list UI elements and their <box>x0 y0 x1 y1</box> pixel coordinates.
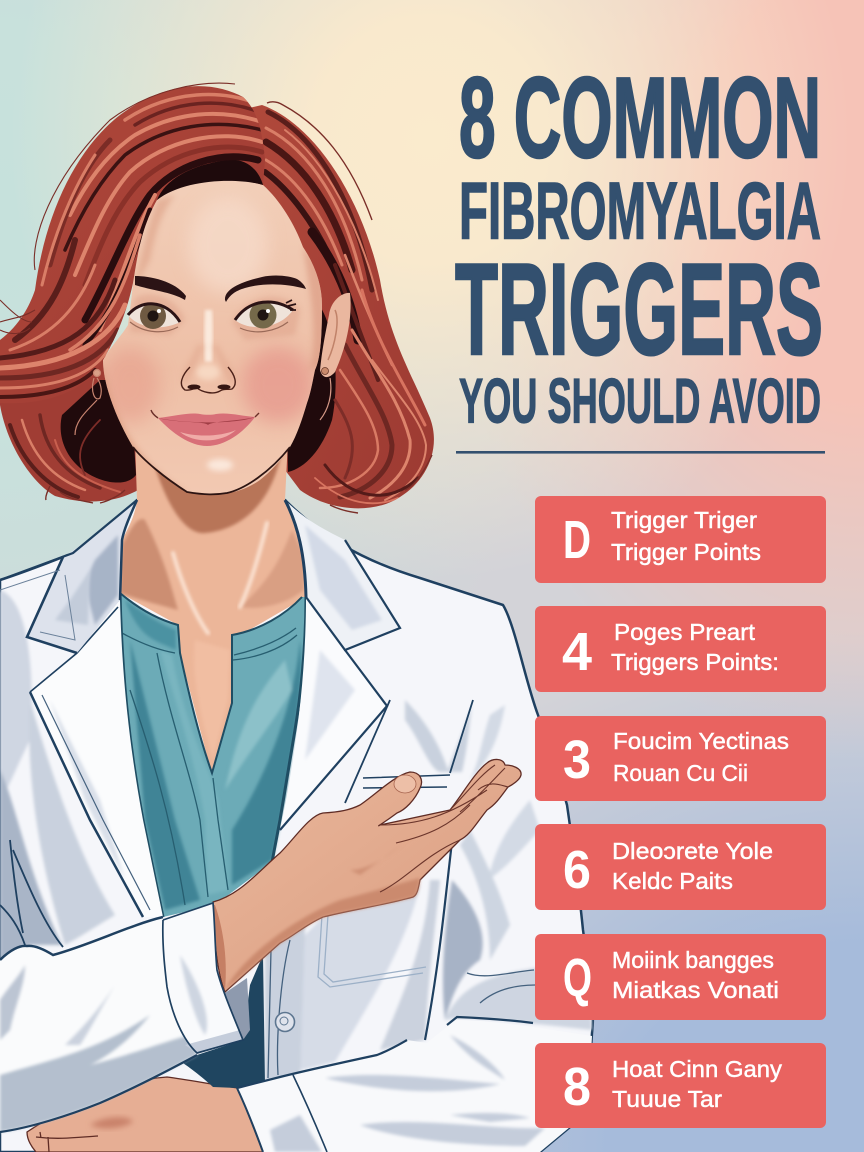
trigger card 6: 8 <box>563 1057 591 1117</box>
trigger card 1: Trigger Triger <box>611 507 757 533</box>
trigger card 4 <box>535 824 826 910</box>
lips <box>151 410 259 446</box>
trigger card 3 <box>535 716 826 801</box>
left eye <box>128 303 180 332</box>
trigger card 4: 6 <box>563 840 591 900</box>
trigger card 2: 4 <box>562 622 592 682</box>
front hair <box>0 83 265 403</box>
right ear with earring <box>320 293 351 420</box>
left sleeve <box>0 917 197 1132</box>
left cuff <box>163 903 243 1053</box>
face <box>100 180 325 494</box>
trigger card 3: Rouan Cu Cii <box>613 760 748 786</box>
trigger card 3: 3 <box>563 730 591 790</box>
raised hand <box>213 759 521 992</box>
trigger card 5: Miatkas Vonati <box>612 977 779 1003</box>
trigger card 4: Dleoɔrete Yole <box>612 838 773 864</box>
illustration: doctor <box>0 83 593 1152</box>
eyebrows <box>135 276 306 302</box>
lower hand <box>27 1077 263 1152</box>
trigger card 5 <box>535 934 826 1020</box>
trigger card 2 <box>535 606 826 692</box>
back hair <box>0 102 434 513</box>
pockets and button <box>276 775 450 1032</box>
trigger card 1: D <box>563 510 591 570</box>
neck and chest <box>120 440 306 775</box>
right sleeve <box>237 1020 592 1152</box>
left collar and lapel <box>0 500 163 917</box>
right collar and lapel <box>280 500 473 830</box>
trigger card 3: Foucim Yectinas <box>613 728 789 754</box>
trigger card 6: Tuuue Tar <box>612 1086 722 1112</box>
trigger card 2: Triggers Points: <box>611 649 779 675</box>
blouse <box>120 593 306 917</box>
trigger card 4: Keldc Paits <box>612 868 733 894</box>
left earring <box>75 370 101 435</box>
trigger card 1 <box>535 496 826 583</box>
trigger card 6 <box>535 1043 826 1128</box>
title divider <box>456 451 825 454</box>
nose <box>181 367 235 393</box>
right eye <box>235 300 296 332</box>
trigger card 5: Moiink bangges <box>612 947 774 973</box>
trigger card 1: Trigger Points <box>611 539 761 565</box>
trigger card 5: Q <box>563 948 592 1008</box>
trigger card 6: Hoat Cinn Gany <box>612 1056 783 1082</box>
title <box>455 55 823 436</box>
lab coat body <box>0 500 593 1152</box>
trigger card 2: Poges Preart <box>614 619 756 645</box>
inner dark shirt strip <box>183 955 265 1088</box>
